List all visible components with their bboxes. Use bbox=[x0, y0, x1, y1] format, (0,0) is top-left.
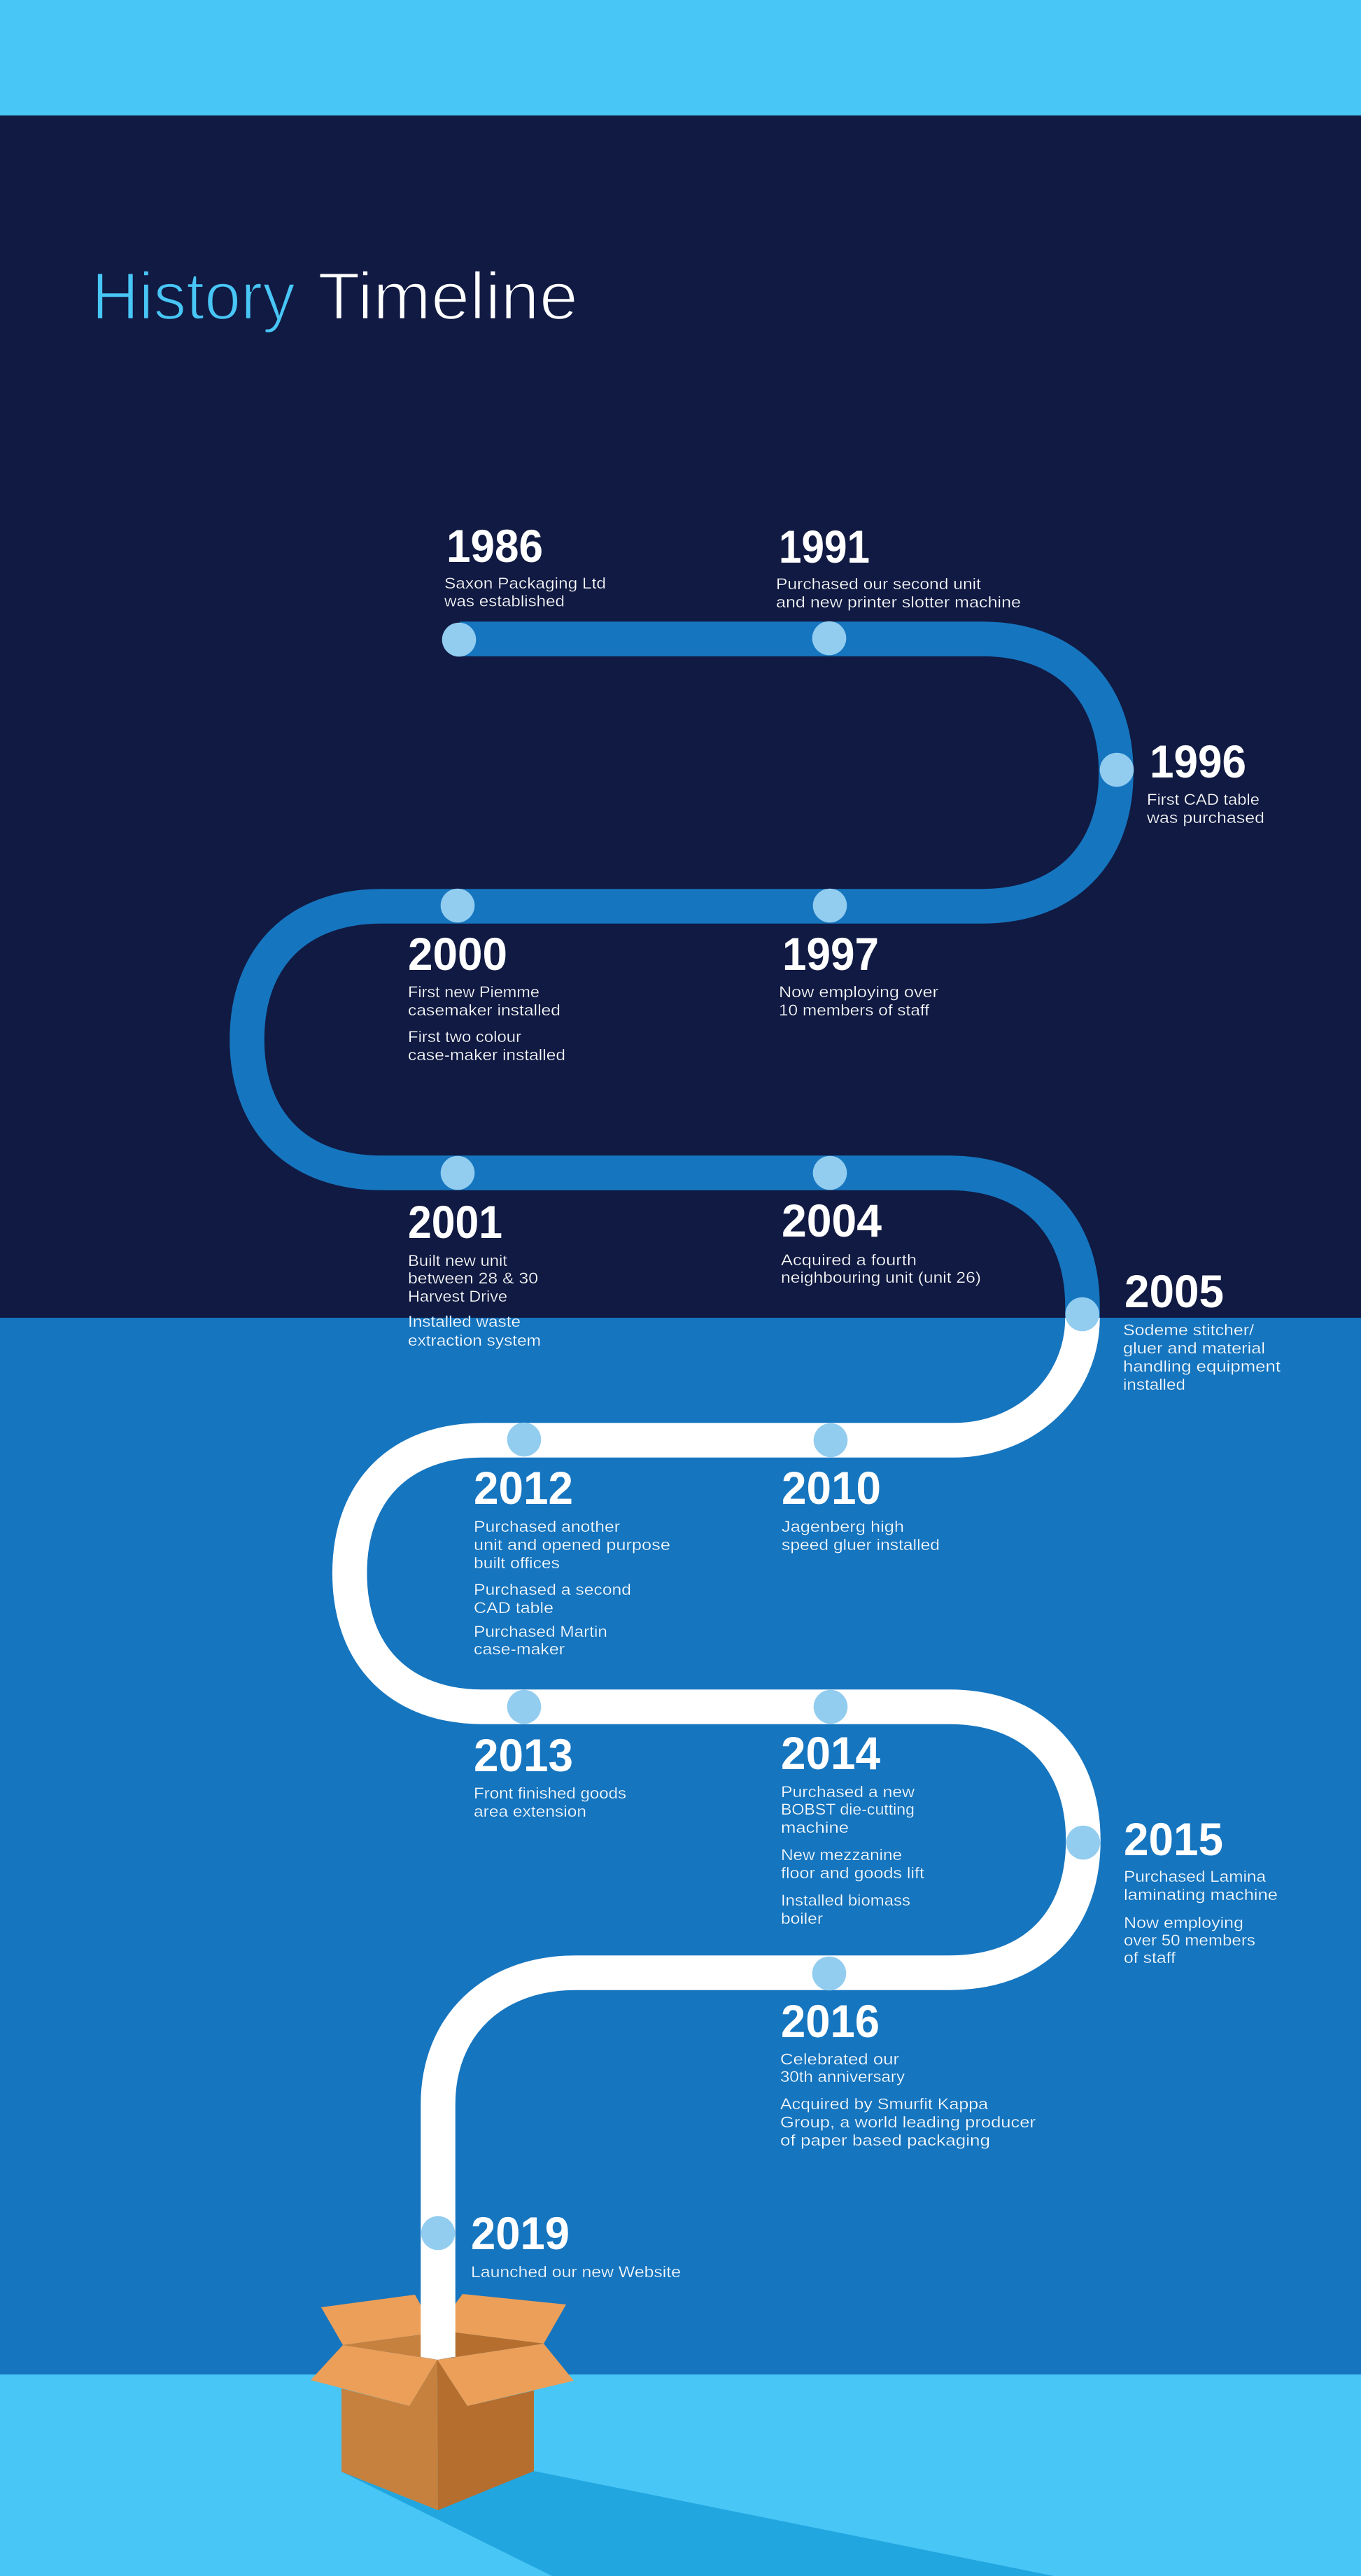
cardboard box front bbox=[311, 2344, 574, 2510]
milestone 2014: New mezzanine bbox=[781, 1846, 902, 1864]
milestone 2015: laminating machine bbox=[1124, 1886, 1278, 1903]
milestone 2013: area extension bbox=[474, 1803, 586, 1820]
milestone 2012: CAD table bbox=[474, 1599, 553, 1617]
milestone 2010 bbox=[782, 1423, 940, 1554]
milestone 2012 bbox=[474, 1423, 670, 1658]
milestone 2005: gluer and material bbox=[1123, 1339, 1265, 1357]
milestone 2013: 2013 bbox=[474, 1729, 573, 1781]
milestone 2012: case-maker bbox=[474, 1640, 565, 1658]
milestone 2001: Harvest Drive bbox=[408, 1288, 507, 1305]
title: Timeline bbox=[318, 259, 578, 334]
milestone 2005: Sodeme stitcher/ bbox=[1123, 1321, 1255, 1339]
milestone 2016: Group, a world leading producer bbox=[780, 2113, 1036, 2131]
milestone 2016 bbox=[780, 1957, 1036, 2149]
milestone 2016: of paper based packaging bbox=[780, 2132, 990, 2149]
milestone 2001: 2001 bbox=[408, 1196, 502, 1248]
milestone 2000: First two colour bbox=[408, 1028, 521, 1046]
milestone 2014: floor and goods lift bbox=[781, 1864, 924, 1882]
milestone 2013 bbox=[474, 1690, 626, 1820]
milestone 1991 bbox=[776, 521, 1021, 655]
milestone 2014: machine bbox=[781, 1819, 849, 1836]
milestone 2015: over 50 members bbox=[1124, 1931, 1255, 1949]
milestone 2012: Purchased another bbox=[474, 1518, 620, 1535]
box shadow bbox=[341, 2471, 1054, 2576]
milestone 2001: Built new unit bbox=[408, 1252, 507, 1269]
milestone 1991: and new printer slotter machine bbox=[776, 593, 1021, 611]
milestone 2000: case-maker installed bbox=[408, 1046, 565, 1064]
milestone 2016: 30th anniversary bbox=[780, 2068, 905, 2085]
milestone 2019 bbox=[421, 2207, 681, 2281]
milestone 2015: Purchased Lamina bbox=[1124, 1868, 1267, 1885]
title: History bbox=[92, 259, 295, 334]
milestone 1986: Saxon Packaging Ltd bbox=[444, 575, 606, 592]
milestone 1996: First CAD table bbox=[1147, 791, 1260, 808]
top band bbox=[0, 0, 1361, 115]
milestone 2001 bbox=[408, 1156, 541, 1349]
milestone 1997: 10 members of staff bbox=[779, 1001, 930, 1019]
milestone 1996: was purchased bbox=[1146, 809, 1264, 826]
milestone 2005: handling equipment bbox=[1123, 1358, 1281, 1375]
milestone 2000: casemaker installed bbox=[408, 1001, 560, 1019]
milestone 2010: 2010 bbox=[782, 1462, 881, 1514]
milestone 1997 bbox=[779, 889, 938, 1019]
milestone 2000: 2000 bbox=[408, 928, 507, 980]
milestone 2015: 2015 bbox=[1124, 1813, 1223, 1865]
bottom floor band bbox=[0, 2374, 1361, 2576]
milestone 2014: BOBST die-cutting bbox=[781, 1801, 915, 1818]
milestone 1991: 1991 bbox=[779, 521, 870, 572]
milestone 2012: built offices bbox=[474, 1554, 560, 1572]
milestone 2004: 2004 bbox=[782, 1195, 882, 1246]
milestone 2016: Acquired by Smurfit Kappa bbox=[780, 2095, 989, 2113]
milestone 2014: 2014 bbox=[781, 1727, 880, 1779]
dark navy panel bbox=[0, 115, 1361, 1318]
milestone 2014: Purchased a new bbox=[781, 1783, 915, 1801]
timeline path: blue section bbox=[247, 639, 1116, 1318]
box rear flaps and interior bbox=[321, 2294, 566, 2360]
milestone 1986 bbox=[442, 520, 606, 656]
milestone 1996 bbox=[1100, 736, 1264, 826]
milestone 2004: neighbouring unit (unit 26) bbox=[781, 1269, 981, 1286]
mid blue panel bbox=[0, 1318, 1361, 2374]
milestone 2004: Acquired a fourth bbox=[781, 1251, 917, 1269]
milestone 2000 bbox=[408, 889, 565, 1064]
milestone 1997: Now employing over bbox=[779, 983, 938, 1001]
milestone 2015: Now employing bbox=[1124, 1914, 1243, 1931]
title bbox=[92, 259, 578, 334]
milestone 2015 bbox=[1066, 1813, 1278, 1966]
milestone 2016: Celebrated our bbox=[780, 2050, 899, 2068]
milestone 2014: boiler bbox=[781, 1910, 823, 1927]
milestone 1986: was established bbox=[444, 592, 565, 610]
milestone 2013: Front finished goods bbox=[474, 1785, 626, 1802]
milestone 2004 bbox=[781, 1156, 981, 1286]
milestone 2001: extraction system bbox=[408, 1332, 541, 1349]
milestone 2014 bbox=[781, 1690, 924, 1927]
milestone 2012: 2012 bbox=[474, 1462, 573, 1514]
milestone 2005: installed bbox=[1123, 1376, 1185, 1393]
milestone 1996: 1996 bbox=[1150, 736, 1246, 787]
milestone 2010: Jagenberg high bbox=[782, 1518, 904, 1535]
milestone 2019: Launched our new Website bbox=[471, 2263, 681, 2281]
milestone 2016: 2016 bbox=[781, 1995, 880, 2047]
milestone 2010: speed gluer installed bbox=[782, 1536, 940, 1554]
milestone 2005: 2005 bbox=[1124, 1265, 1224, 1317]
timeline path: white section bbox=[350, 1318, 1083, 2360]
milestone 2001: Installed waste bbox=[408, 1313, 521, 1330]
milestone 2019: 2019 bbox=[471, 2207, 570, 2259]
milestone 1997: 1997 bbox=[782, 928, 879, 980]
milestone 1991: Purchased our second unit bbox=[776, 575, 981, 593]
milestone 2012: Purchased Martin bbox=[474, 1623, 607, 1640]
milestone 2001: between 28 & 30 bbox=[408, 1269, 538, 1287]
milestone 2012: Purchased a second bbox=[474, 1581, 631, 1598]
milestone 2014: Installed biomass bbox=[781, 1892, 910, 1909]
milestone 2015: of staff bbox=[1124, 1949, 1176, 1966]
milestone 2000: First new Piemme bbox=[408, 983, 540, 1001]
milestone 2012: unit and opened purpose bbox=[474, 1536, 670, 1554]
milestone 1986: 1986 bbox=[446, 520, 543, 572]
milestone 2005 bbox=[1065, 1265, 1281, 1393]
